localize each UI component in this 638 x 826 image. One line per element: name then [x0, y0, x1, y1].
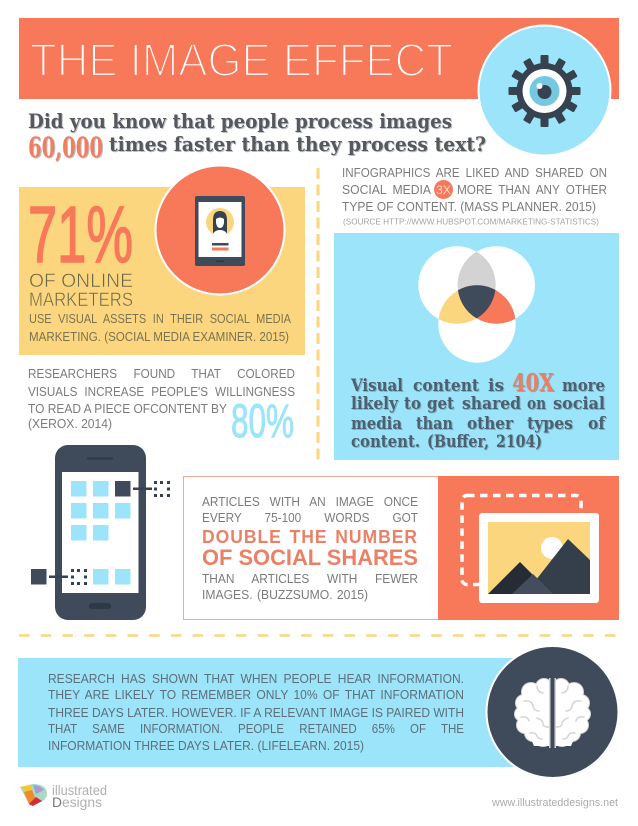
text block: infographics liked and shared: TYPE OF CONTENT. (MASS PLANNER. 2015) [342, 200, 596, 214]
intro question text [28, 109, 486, 164]
icon: gear with eye [478, 26, 610, 156]
text block: visual content: than [416, 414, 453, 434]
heading: of online marketers: OF ONLINE [29, 270, 133, 292]
panel: 71% of online marketers [19, 187, 305, 355]
text block: infographics liked and shared: (SOURCE HTTP://WWW.HUBSPOT.COM/MARKETING-STATISTICS) [343, 216, 599, 226]
icon: smartphone with app squares [31, 445, 170, 620]
logo: Illustrated Designs [20, 782, 107, 810]
text block: infographics liked and shared: SOCIAL MEDIA [342, 183, 432, 197]
text block: articles with an image: IMAGES. (BUZZSUMO. 2015) [202, 588, 368, 602]
icon: picture frame on orange [438, 476, 619, 620]
text block: visual content: shared [462, 394, 521, 414]
text block: visual content: other [467, 414, 514, 434]
heading: double the number of social shares [202, 527, 418, 570]
website url: www.illustrateddesigns.net [491, 797, 618, 809]
header banner [19, 18, 619, 99]
text block: infographics liked and shared: MORE THAN ANY OTHER [457, 183, 607, 197]
text block: visual assets: USE VISUAL ASSETS IN THEIR SOCIAL MEDIA [29, 312, 292, 326]
text block: visual assets [29, 312, 292, 344]
text block: articles with an image: ARTICLES WITH AN IMAGE ONCE [202, 495, 418, 509]
text block: research: THEY ARE LIKELY TO REMEMBER ONLY 10% OF THAT INFORMATION [48, 688, 464, 702]
text block: articles with an image [202, 495, 418, 602]
text block: visual content: of [588, 414, 607, 434]
text block: visual content: likely [351, 394, 399, 414]
stat: 80%: 80% [231, 394, 294, 447]
text block: visual content: Visual [350, 376, 403, 396]
text block: visual content [350, 368, 607, 452]
text block: visual content: content. [351, 432, 420, 452]
text block: research: THAT SAME INFORMATION. PEOPLE RETAINED 65% OF THE [48, 722, 464, 736]
text block: research: THREE DAYS LATER. HOWEVER. IF A RELEVANT IMAGE IS PAIRED WITH [48, 706, 464, 720]
panel: double the number of social shares [184, 476, 438, 620]
text block: visual content: more [562, 376, 605, 396]
stat: 60,000: 60,000 [28, 131, 103, 164]
heading: double the number of social shares: OF SOCIAL SHARES [202, 545, 418, 570]
panel: research on memory [18, 658, 518, 767]
stat: 40X: 40X [512, 368, 554, 397]
text block: visual content: to [404, 394, 421, 414]
text block: articles with an image: THAN ARTICLES WITH FEWER [202, 572, 418, 586]
intro question text: Did you know that people process images [28, 109, 452, 133]
text block: colored visuals: (XEROX. 2014) [28, 417, 112, 431]
text block: visual content: (Buffer, [427, 432, 489, 452]
text block: visual content: get [427, 394, 454, 414]
icon: brain [486, 646, 618, 778]
heading: of online marketers: MARKETERS [29, 289, 133, 311]
stat: 71%: 71% [28, 190, 133, 279]
text block: visual content: on [527, 394, 546, 414]
panel: visual content 40X [334, 233, 619, 460]
text block: infographics liked and shared: INFOGRAPHICS ARE LIKED AND SHARED ON [342, 166, 607, 180]
text block: research [48, 672, 464, 753]
text block: research: INFORMATION THREE DAYS LATER. (LIFELEARN. 2015) [48, 739, 364, 753]
logo: Illustrated Designs: Designs [52, 794, 102, 810]
chart: venn diagram [418, 246, 535, 363]
text block: colored visuals: TO READ A PIECE OFCONTENT BY [28, 402, 228, 416]
text block: visual content: 2104) [496, 432, 542, 452]
heading: of online marketers [29, 270, 133, 311]
text block: colored visuals: VISUALS INCREASE PEOPLE'S WILLINGNESS [28, 385, 295, 399]
text block: articles with an image: EVERY 75-100 WORDS GOT [202, 511, 418, 525]
logo: Illustrated Designs: illustrated [52, 782, 107, 798]
text block: visual content: content [413, 376, 479, 396]
text block: visual content: is [488, 376, 504, 396]
badge: 3X [434, 180, 453, 199]
text block: visual content: types [527, 414, 573, 434]
text block: colored visuals [28, 367, 295, 431]
text block: visual assets: MARKETING. (SOCIAL MEDIA EXAMINER. 2015) [29, 330, 289, 344]
icon: logo mark [20, 784, 47, 806]
text block: research: RESEARCH HAS SHOWN THAT WHEN PEOPLE HEAR INFORMATION. [48, 672, 464, 686]
intro question text: times faster than they process text? [109, 132, 486, 156]
title: THE IMAGE EFFECT [30, 34, 453, 86]
text block: colored visuals: RESEARCHERS FOUND THAT COLORED [28, 367, 295, 381]
heading: double the number of social shares: DOUBLE THE NUMBER [202, 527, 418, 547]
icon: tablet with person [156, 166, 284, 294]
badge: 3X: 3X [436, 183, 451, 197]
text block: visual content: social [553, 394, 605, 414]
text block: infographics liked and shared [342, 166, 607, 226]
text block: visual content: media [351, 414, 402, 434]
